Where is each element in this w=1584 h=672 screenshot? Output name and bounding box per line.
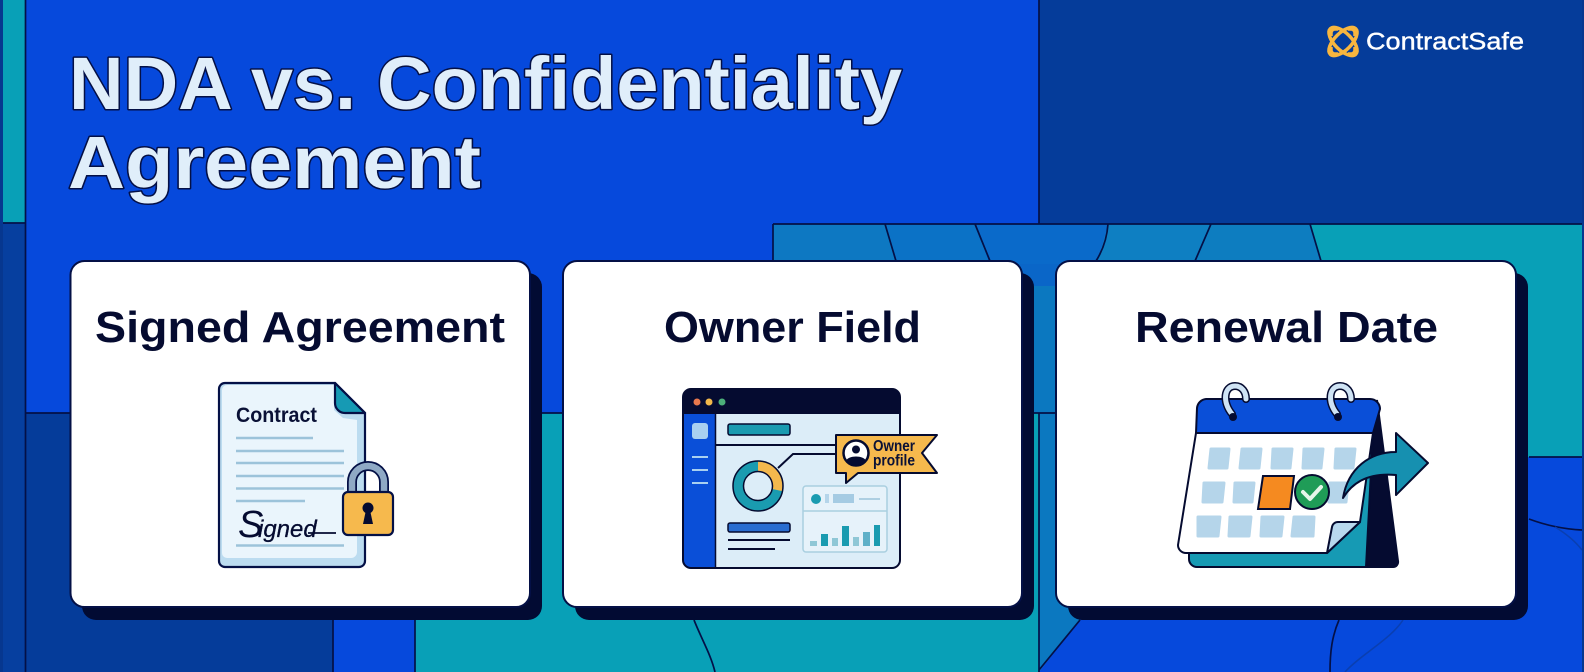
- icon: dashboard window with owner profile: [683, 389, 937, 568]
- highlighted date: [1258, 476, 1294, 509]
- panel: owner field: [563, 261, 1034, 620]
- signature: igned: [258, 516, 317, 543]
- arrow: renewal forward: [1343, 433, 1428, 498]
- heading: renewal date: Renewal Date: [1135, 303, 1438, 352]
- panel: signed agreement: [70, 261, 542, 620]
- signature: [238, 504, 336, 546]
- logo wordmark: ContractSafe: [1366, 28, 1524, 56]
- callout: owner profile: Owner: [873, 438, 915, 455]
- callout: owner profile: [836, 435, 937, 483]
- icon: signed contract with lock: [219, 383, 393, 567]
- title: Agreement: [68, 121, 481, 204]
- title: [68, 42, 902, 204]
- donut chart: [733, 461, 783, 511]
- panel: renewal date: [1056, 261, 1528, 620]
- mini bar chart panel: [803, 486, 887, 552]
- heading: owner field: Owner Field: [664, 303, 921, 352]
- icon: logo mark: [1324, 23, 1362, 60]
- heading: signed agreement: Signed Agreement: [95, 303, 505, 352]
- lock: [343, 466, 393, 535]
- document title: Contract: [236, 404, 317, 427]
- signature: S: [238, 504, 263, 546]
- icon: check mark: [1295, 475, 1329, 509]
- title: NDA vs. Confidentiality: [69, 42, 902, 125]
- callout: owner profile: profile: [873, 452, 915, 470]
- icon: calendar with forward arrow: [1178, 386, 1428, 567]
- logo: ContractSafe: [1324, 23, 1524, 60]
- calendar rings: [1226, 386, 1351, 421]
- calendar date tiles: [1198, 449, 1355, 536]
